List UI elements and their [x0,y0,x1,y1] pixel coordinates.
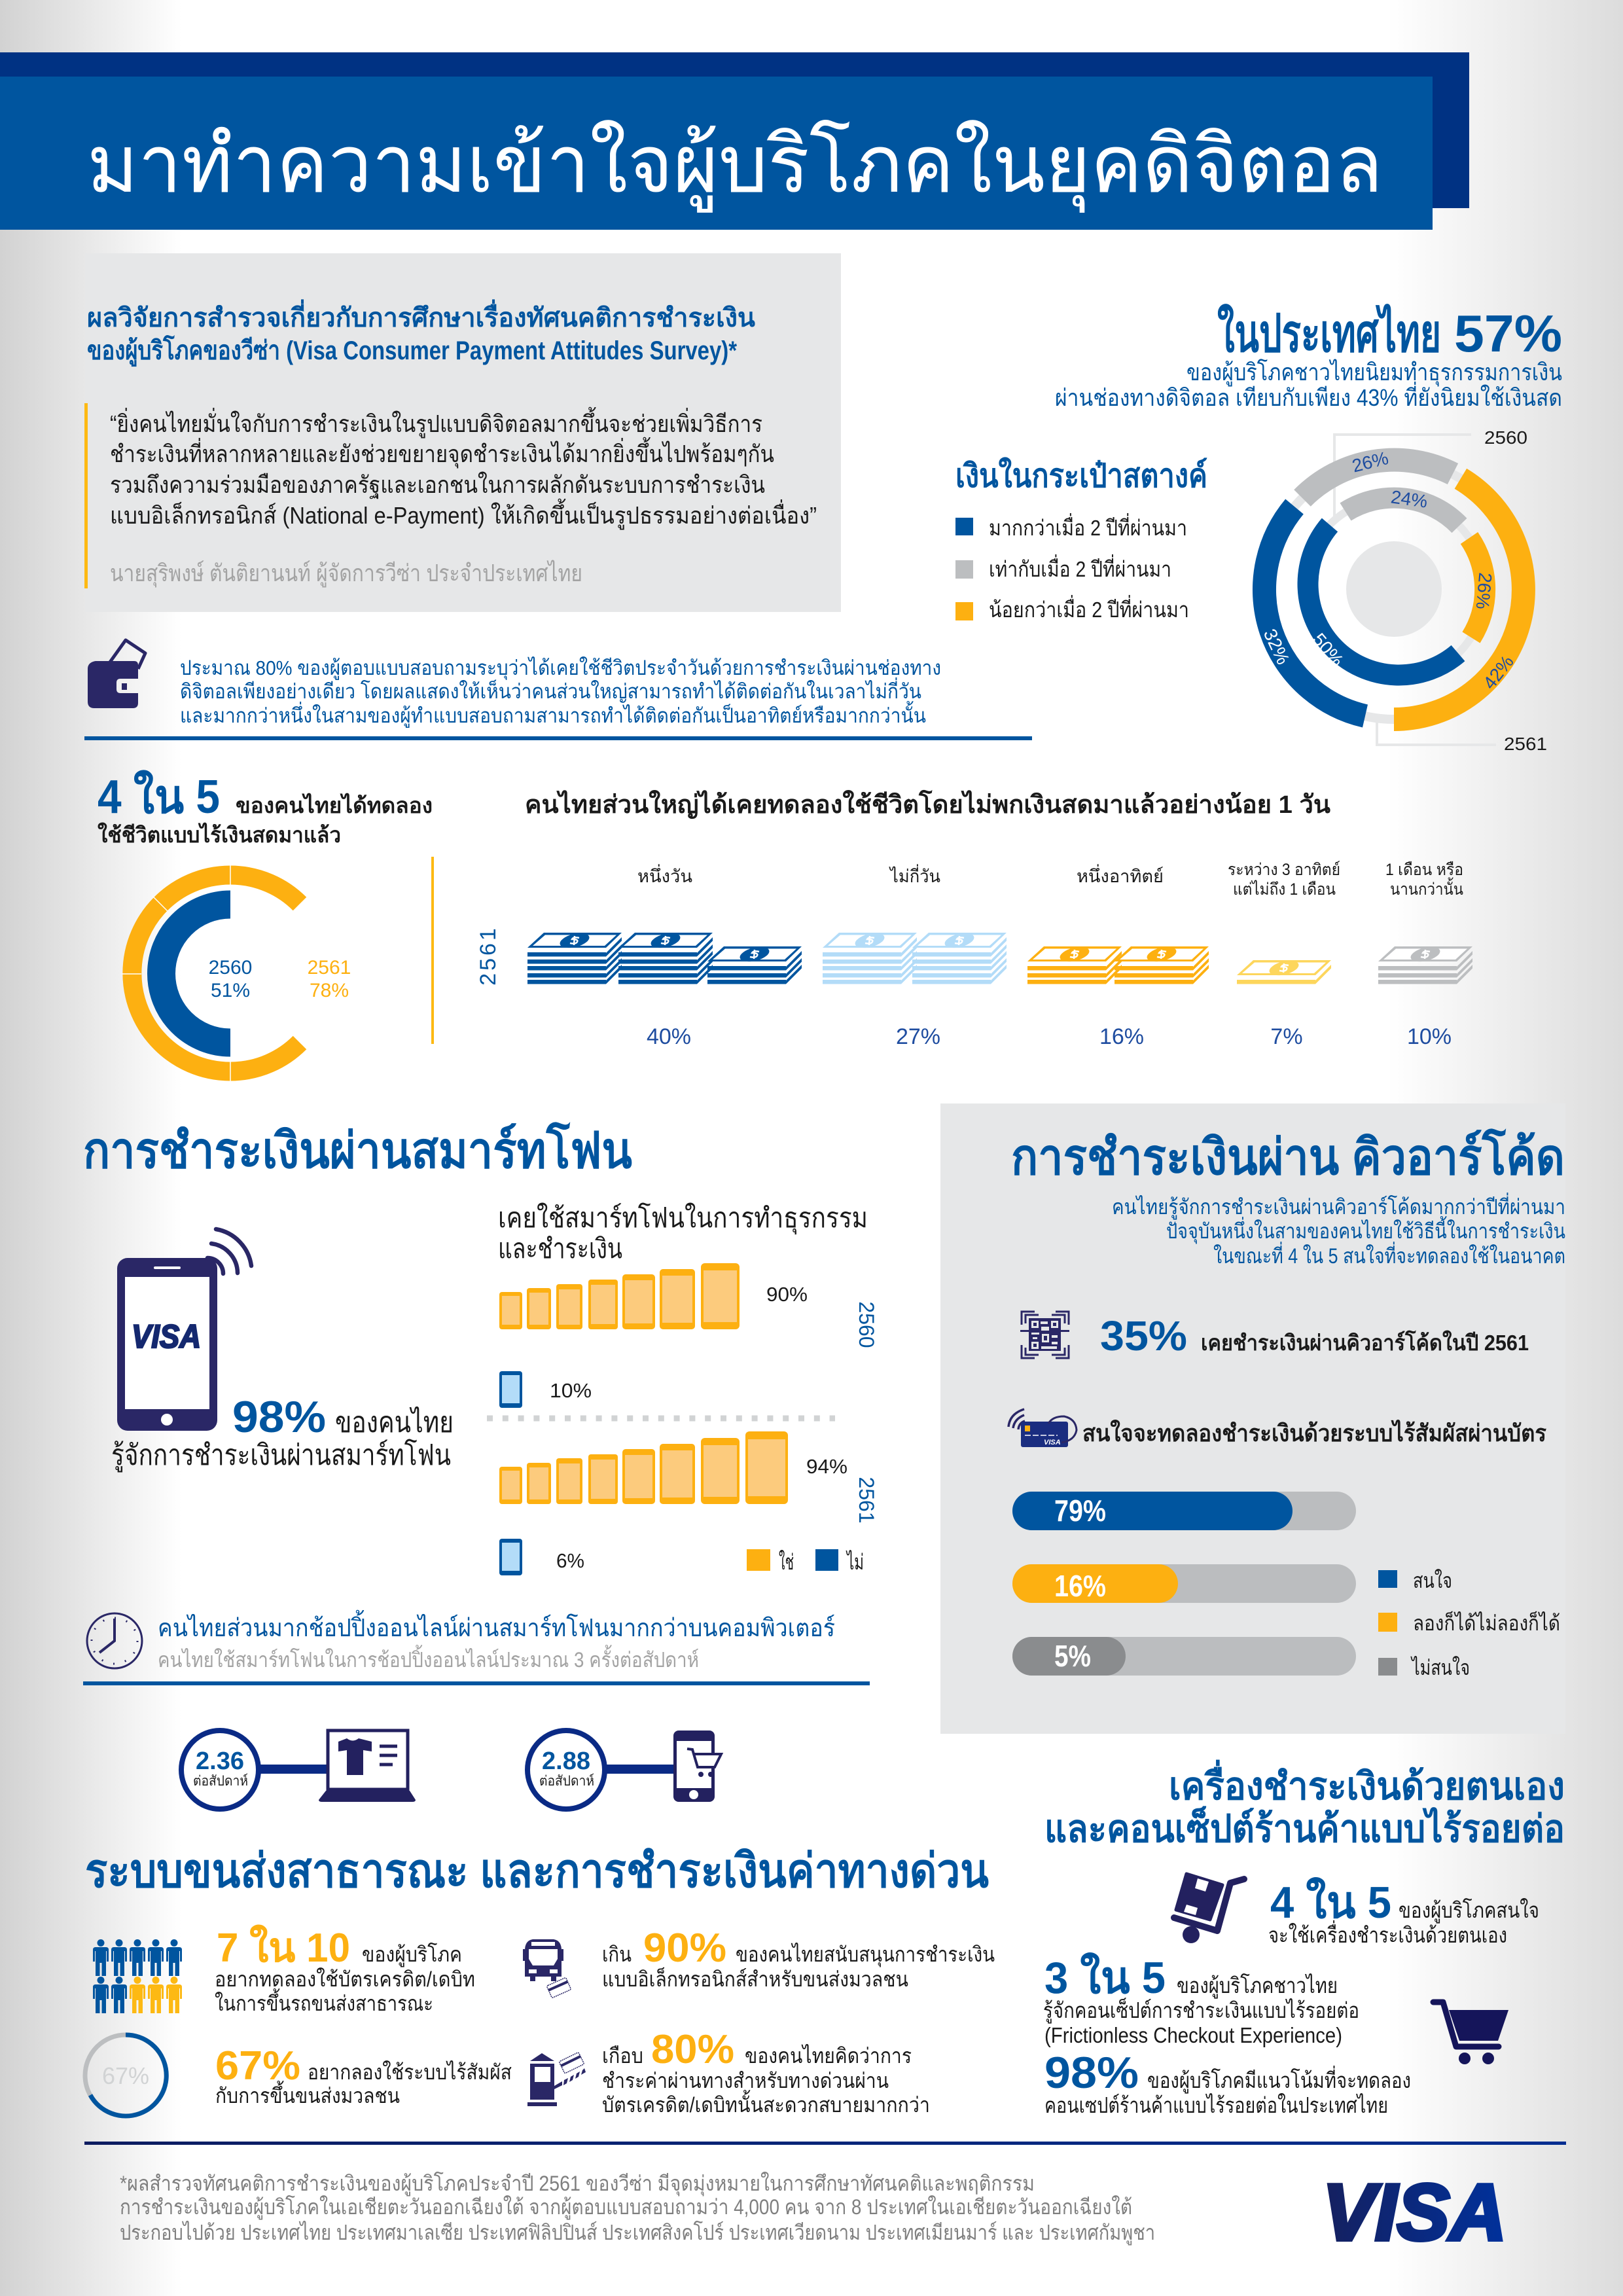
money percentages [647,1024,1452,1049]
stat: 4 in 5: 4 ใน 5 [1270,1876,1391,1928]
legend: yes no: ไม่ [846,1550,864,1574]
survey heading [87,299,755,367]
quote text [110,406,817,530]
stat: smartphone 2.88: 2.88 [542,1748,590,1775]
icon: clock [87,1613,142,1668]
icon: phone with VISA: VISA [132,1318,201,1355]
QR intro text [1112,1193,1565,1268]
wallet statistic text: และมากกว่าหนึ่งในสามของผู้ทำแบบสอบถามสามารถทำได้ติดต่อกันเป็นอาทิตย์หรือมากกว่านั้น [180,701,926,728]
stat: 35 percent: 35% [1100,1312,1187,1359]
heading: 4 in 5: ใช้ชีวิตแบบไร้เงินสดมาแล้ว [98,822,341,847]
icon: QR code [1020,1312,1069,1358]
94 percent label: 94% [806,1455,847,1478]
legend: yes no [747,1549,864,1574]
footnote: *ผลสำรวจทัศนคติการชำระเงินของผู้บริโภคประจำปี 2561 ของวีซ่า มีจุดมุ่งหมายในการศึกษาทัศนคติและพฤติกรรม [120,2172,1035,2197]
chart: radial wallet donut: 32% [1260,626,1294,668]
column labels: ระหว่าง 3 อาทิตย์ [1228,861,1340,879]
stat: 98 percent know [111,1392,454,1473]
column labels: หนึ่งอาทิตย์ [1077,864,1164,886]
heading: 4 in 5: 4 ใน 5 [98,769,220,823]
stat: computer 2.36: ต่อสัปดาห์ [193,1773,248,1789]
phones row 2560 yes [499,1263,740,1329]
stat: smartphone 2.88 [527,1731,721,1809]
heading: self checkout [1044,1759,1565,1850]
column labels: นานกว่านั้น [1390,877,1463,899]
chart: 67 percent ring [85,2035,166,2116]
stat: 90 percent: 90% [643,1926,726,1971]
chart: cashless C donut [122,864,351,1083]
stat: 67 percent: 67% [215,2043,300,2089]
stat: 4 in 5 [1268,1876,1539,1947]
chart: radial wallet donut: 2561 [1504,734,1547,754]
money percentages: 16% [1099,1024,1144,1049]
stacks: one day 40 percent [527,931,802,984]
panel: QR code payment [940,1103,1565,1734]
phone row 2560 no [499,1371,522,1408]
chart: radial wallet donut: 26% [1472,572,1495,610]
icon: bus with card [523,1939,571,1998]
stat: 3 in 5: รู้จักคอนเซ็ปต์การชำระเงินแบบไร้รอยต่อ [1043,1998,1359,2024]
chart: cashless C donut: 2561 [308,957,351,978]
legend: yes no: ใช่ [779,1550,794,1574]
stat: 67 percent [215,2043,512,2108]
online shopping text [158,1609,835,1672]
headline: 57 percent: ผ่านช่องทางดิจิตอล เทียบกับเพียง 43% ที่ยังนิยมใช้เงินสด [1055,382,1562,411]
stat: 90 percent: ของคนไทยสนับสนุนการชำระเงิน [736,1943,995,1967]
icon: phone with cart [673,1731,721,1802]
6 percent label: 6% [556,1549,584,1572]
headline: 57 percent: ของผู้บริโภคชาวไทยนิยมทำธุรกรรมการเงิน [1186,359,1562,387]
stat: 90 percent: เกิน [602,1943,632,1966]
stat: 80 percent: ชำระค่าผ่านทางสำหรับทางด่วนผ่าน [602,2069,889,2092]
online shopping text: คนไทยใช้สมาร์ทโฟนในการช้อปปิ้งออนไลน์ประมาณ 3 ครั้งต่อสัปดาห์ [158,1645,699,1672]
QR intro text: คนไทยรู้จักการชำระเงินผ่านคิวอาร์โค้ดมากกว่าปีที่ผ่านมา [1112,1193,1565,1220]
quote accent bar [84,403,88,588]
stat: 80 percent: เกือบ [602,2044,643,2068]
heading: self checkout: เครื่องชำระเงินด้วยตนเอง [1169,1759,1565,1808]
money percentages: 10% [1407,1024,1452,1049]
panel: survey quote [84,253,841,612]
bar chart: contactless interest: 79% [1054,1494,1106,1528]
heading: smartphone payment: การชำระเงินผ่านสมาร์ทโฟน [83,1121,632,1179]
heading: cashless days: คนไทยส่วนใหญ่ได้เคยทดลองใช้ชีวิตโดยไม่พกเงินสดมาแล้วอย่างน้อย 1 วัน [525,789,1330,819]
year label 2560: 2560 [855,1301,878,1348]
phones row 2561 yes [499,1431,788,1504]
quote text: ชำระเงินที่หลากหลายและยังช่วยขยายจุดชำระเงินได้มากยิ่งขึ้นไปพร้อมๆกัน [110,437,774,469]
stat: 80 percent: 80% [651,2027,734,2072]
stat: 7 in 10: อยากทดลองใช้บัตรเครดิต/เดบิท [215,1967,475,1991]
icon: toll booth [527,2053,586,2106]
stat: 3 in 5: (Frictionless Checkout Experience) [1044,2023,1342,2047]
icon: laptop with shirt [319,1731,416,1802]
money percentages: 40% [647,1024,691,1049]
money percentages: 27% [896,1024,940,1049]
stat: 3 in 5 [1043,1952,1359,2047]
stat: 3 in 5: ของผู้บริโภคชาวไทย [1177,1973,1338,1999]
title: มาทำความเข้าใจผู้บริโภคในยุคดิจิตอล [87,120,1383,213]
stat: 98 percent: คอนเซปต์ร้านค้าแบบไร้รอยต่อในประเทศไทย [1044,2093,1388,2117]
legend: wallet money: มากกว่าเมื่อ 2 ปีที่ผ่านมา [989,513,1187,540]
stat: 67 percent: อยากลองใช้ระบบไร้สัมผัส [308,2060,512,2084]
stat: smartphone 2.88: ต่อสัปดาห์ [539,1773,594,1789]
icon: contactless card [1008,1409,1077,1447]
QR intro text: ในขณะที่ 4 ใน 5 สนใจที่จะทดลองใช้ในอนาคต [1213,1242,1565,1268]
icon: contactless card: VISA [1044,1439,1061,1446]
column labels: หนึ่งวัน [637,864,692,886]
legend: wallet money [955,513,1189,622]
column labels: แต่ไม่ถึง 1 เดือน [1233,880,1336,899]
headline: 57 percent: ในประเทศไทย [1217,303,1441,363]
heading: public transport: ระบบขนส่งสาธารณะ และการชำระเงินค่าทางด่วน [85,1845,989,1897]
year label 2561: 2561 [476,925,501,986]
stat: 7 in 10 [215,1924,475,2015]
legend: wallet money: น้อยกว่าเมื่อ 2 ปีที่ผ่านมา [989,595,1189,622]
chart: cashless C donut: 51% [211,980,250,1001]
stat: computer 2.36 [181,1731,416,1809]
chart: radial wallet donut: 42% [1479,652,1518,693]
chart heading: used smartphone: และชำระเงิน [498,1233,622,1264]
chart: money stacks [527,931,1472,984]
survey heading: ของผู้บริโภคของวีซ่า (Visa Consumer Payment Attitudes Survey)* [87,335,737,367]
icon: hand truck [1174,1874,1244,1943]
chart: 67 percent ring: 67% [102,2062,149,2089]
legend: interest: ไม่สนใจ [1410,1656,1470,1679]
chart: radial wallet donut [1260,427,1547,754]
stack: one month 10 percent [1378,944,1472,984]
online shopping text: คนไทยส่วนมากช้อปปิ้งออนไลน์ผ่านสมาร์ทโฟนมากกว่าบนคอมพิวเตอร์ [158,1609,835,1642]
VISA logo: VISA [1323,2168,1507,2257]
contactless heading: สนใจจะทดลองชำระเงินด้วยระบบไร้สัมผัสผ่านบัตร [1082,1419,1547,1446]
wallet money heading: เงินในกระเป๋าสตางค์ [955,457,1207,494]
chart: cashless C donut: 78% [310,980,349,1001]
chart heading: used smartphone: เคยใช้สมาร์ทโฟนในการทำธุรกรรม [498,1202,868,1235]
money percentages: 7% [1270,1024,1303,1049]
icon: wallet [88,640,145,708]
bar chart: contactless interest [1012,1492,1356,1676]
stat: 4 in 5: จะใช้เครื่องชำระเงินด้วยตนเอง [1268,1920,1507,1947]
wallet statistic text: ประมาณ 80% ของผู้ตอบแบบสอบถามระบุว่าได้เคยใช้ชีวิตประจำวันด้วยการชำระเงินผ่านช่องทาง [180,656,941,681]
10 percent label: 10% [550,1379,592,1402]
year label 2561 right: 2561 [855,1477,878,1524]
stat: 80 percent [602,2027,930,2117]
stat: 98 percent know: ของคนไทย [335,1406,454,1439]
legend: wallet money: เท่ากับเมื่อ 2 ปีที่ผ่านมา [989,554,1171,581]
phone row 2561 no [499,1539,522,1575]
wallet statistic text: ดิจิตอลเพียงอย่างเดียว โดยผลแสดงให้เห็นว่าคนส่วนใหญ่สามารถทำได้ติดต่อกันในเวลาไม่กี่วัน [180,677,921,703]
heading: self checkout: และคอนเซ็ปต์ร้านค้าแบบไร้รอยต่อ [1044,1806,1565,1850]
footnote [120,2172,1155,2246]
stack: three weeks 7 percent [1237,958,1331,984]
icon: phone with VISA [117,1229,251,1431]
stacks: few days 27 percent [823,931,1007,984]
heading: 4 in 5: ของคนไทยได้ทดลอง [236,793,433,817]
stat: 90 percent: แบบอิเล็กทรอนิกส์สำหรับขนส่งมวลชน [602,1967,908,1991]
survey heading: ผลวิจัยการสำรวจเกี่ยวกับการศึกษาเรื่องทัศนคติการชำระเงิน [87,299,755,332]
stat: 98 percent: ของผู้บริโภคมีแนวโน้มที่จะทดลอง [1147,2066,1411,2094]
chart heading: used smartphone [498,1202,868,1264]
stat: 80 percent: บัตรเครดิต/เดบิทนั้นสะดวกสบายมากกว่า [602,2090,930,2117]
headline: 57 percent [1055,303,1562,411]
bar chart: contactless interest: 16% [1054,1569,1106,1603]
column labels: 1 เดือน หรือ [1385,861,1463,879]
stat: 80 percent: ของคนไทยคิดว่าการ [745,2044,912,2068]
footnote: การชำระเงินของผู้บริโภคในเอเชียตะวันออกเฉียงใต้ จากผู้ตอบแบบสอบถามว่า 4,000 คน จาก 8 ประเทศในเอเชียตะวันออกเฉียงใต้ [120,2195,1132,2220]
chart: radial wallet donut: 24% [1389,486,1429,512]
stat: 98 percent [1044,2048,1411,2117]
stat: 4 in 5: ของผู้บริโภคสนใจ [1399,1898,1539,1924]
footnote: ประกอบไปด้วย ประเทศไทย ประเทศมาเลเซีย ประเทศฟิลิปปินส์ ประเทศสิงคโปร์ ประเทศเวียดนาม ประเทศเมียนมาร์ และ ประเทศกัมพูชา [120,2221,1155,2246]
stat: 98 percent know: รู้จักการชำระเงินผ่านสมาร์ทโฟน [111,1439,451,1473]
stat: 90 percent [602,1926,995,1991]
stat: 98 percent: 98% [1044,2048,1139,2098]
stat: 7 in 10: 7 ใน 10 [217,1924,350,1971]
quote text: รวมถึงความร่วมมือของภาครัฐและเอกชนในการผลักดันระบบการชำระเงิน [110,471,765,499]
chart: cashless C donut: 2560 [209,957,252,978]
chart: radial wallet donut: 2560 [1484,427,1527,448]
headline: 57 percent: 57% [1454,304,1562,363]
column labels [637,861,1463,899]
icon: shopping cart [1433,2002,1508,2064]
chart: radial wallet donut: 26% [1350,448,1391,476]
wallet statistic text [180,656,941,728]
stat: 67 percent: กับการขึ้นขนส่งมวลชน [215,2081,400,2108]
stat: 3 in 5: 3 ใน 5 [1044,1952,1166,2003]
heading: QR code: การชำระเงินผ่าน คิวอาร์โค้ด [1011,1128,1565,1185]
stat: 98 percent know: 98% [232,1392,326,1442]
stat: 7 in 10: ของผู้บริโภค [362,1943,462,1967]
heading: 4 in 5 [98,769,433,847]
column labels: ไม่กี่วัน [889,864,940,886]
stat: 35 percent [1100,1312,1529,1359]
stat: computer 2.36: 2.36 [196,1748,244,1775]
icon: people 7 in 10 [93,1939,182,2013]
stacks: one week 16 percent [1027,944,1209,984]
stat: 7 in 10: ในการขึ้นรถขนส่งสาธารณะ [215,1988,433,2015]
header banner [0,52,1469,230]
quote text: แบบอิเล็กทรอนิกส์ (National e-Payment) ให้เกิดขึ้นเป็นรูปธรรมอย่างต่อเนื่อง” [110,498,817,530]
bar chart: contactless interest: 5% [1054,1639,1091,1673]
legend: interest [1378,1569,1560,1679]
chart: radial wallet donut: 50% [1308,629,1347,670]
legend: interest: ลองก็ได้ไม่ลองก็ได้ [1413,1611,1560,1635]
stat: 35 percent: เคยชำระเงินผ่านคิวอาร์โค้ดในปี 2561 [1201,1330,1529,1355]
quote attribution: นายสุริพงษ์ ตันติยานนท์ ผู้จัดการวีซ่า ประจำประเทศไทย [110,560,582,588]
quote text: “ยิ่งคนไทยมั่นใจกับการชำระเงินในรูปแบบดิจิตอลมากขึ้นจะช่วยเพิ่มวิธีการ [110,406,762,439]
legend: interest: สนใจ [1413,1569,1452,1592]
90 percent label: 90% [766,1283,808,1306]
